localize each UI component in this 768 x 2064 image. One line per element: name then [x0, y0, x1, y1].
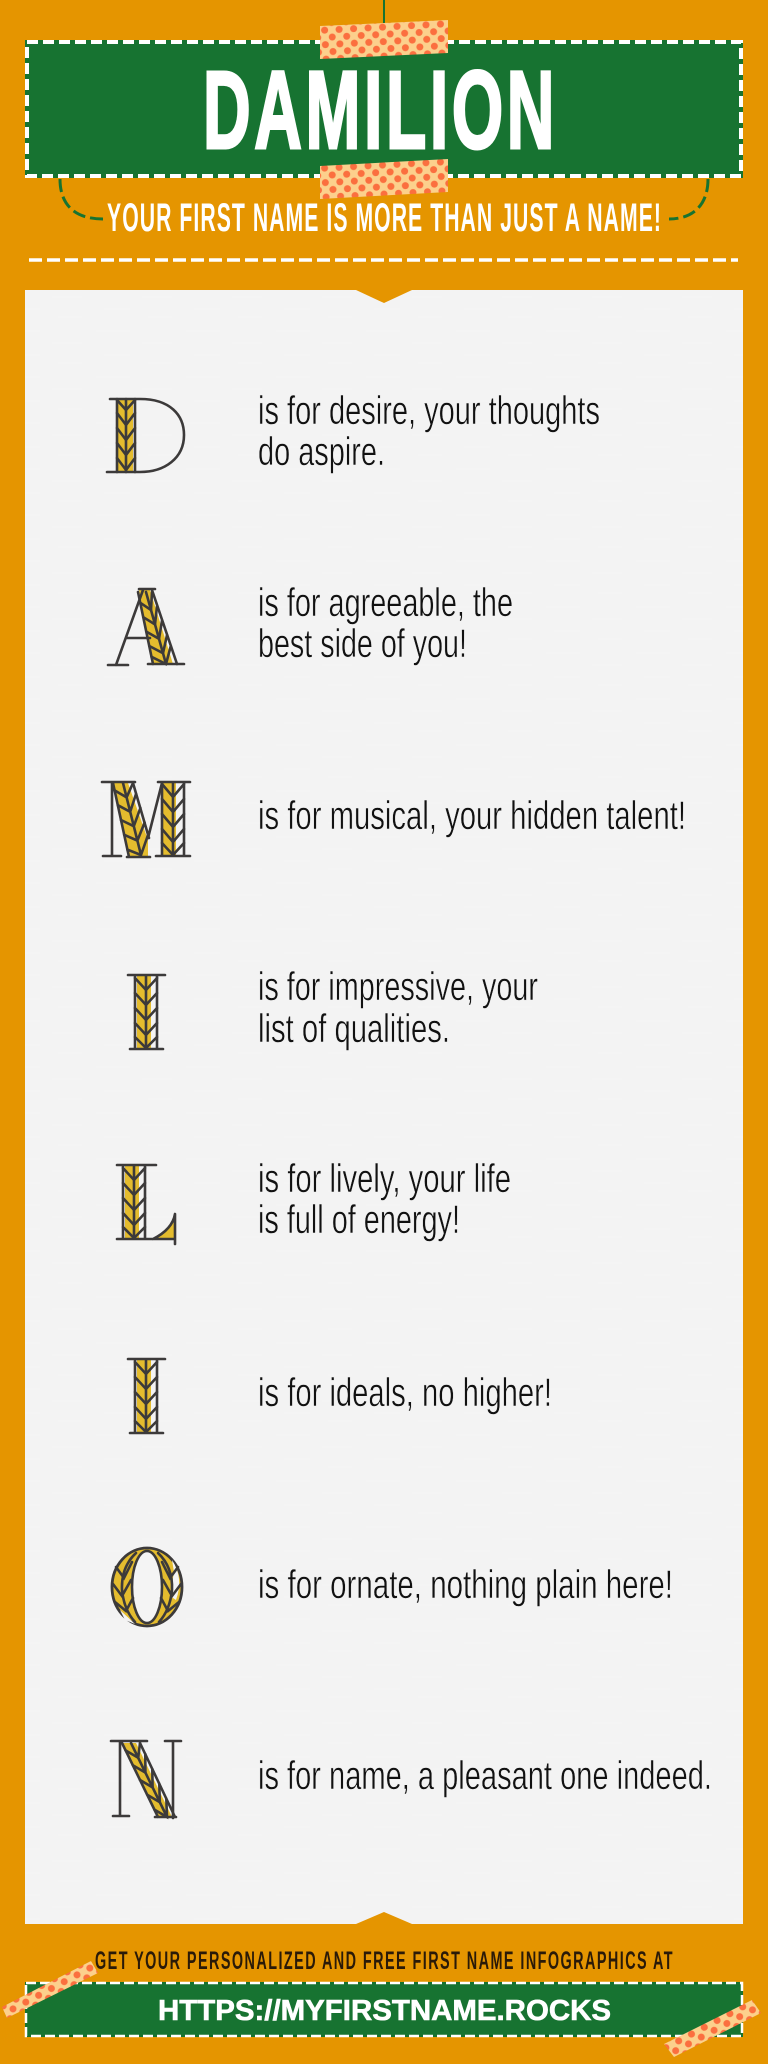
tape: bottom: [320, 159, 448, 199]
row N: [111, 1741, 712, 1818]
row A: [108, 581, 513, 666]
letter A: [108, 589, 184, 665]
text I: is for impressive, your: [258, 965, 538, 1009]
text L: [258, 1157, 511, 1242]
letter M: [102, 782, 190, 857]
dashed divider: [29, 258, 738, 262]
text D: [258, 389, 600, 474]
row D: [107, 389, 600, 474]
text L: is full of energy!: [258, 1198, 460, 1242]
row L: [117, 1157, 511, 1244]
text L: is for lively, your life: [258, 1157, 511, 1201]
footer url: HTTPS://MYFIRSTNAME.ROCKS: [158, 1995, 611, 2027]
row O: [112, 1548, 673, 1626]
text I: [258, 965, 538, 1051]
tape: footer left: [2, 1961, 98, 2018]
text D: is for desire, your thoughts: [258, 389, 600, 433]
row I (first): [128, 965, 538, 1051]
row I (second): [128, 1359, 552, 1433]
letter N: [111, 1741, 181, 1818]
footer banner: [25, 1982, 743, 2037]
letter D: [107, 399, 184, 472]
letter L: [117, 1165, 175, 1244]
panel: letters: [25, 290, 743, 1924]
tape: footer right: [664, 2000, 761, 2057]
text A: is for agreeable, the: [258, 581, 513, 625]
header banner: [25, 40, 743, 178]
connector curve left: [60, 179, 103, 219]
text I: list of qualities.: [258, 1007, 450, 1051]
text A: best side of you!: [258, 622, 467, 666]
connector curve right: [669, 179, 708, 219]
letter I: [128, 1359, 165, 1433]
text A: [258, 581, 513, 666]
letter I: [128, 975, 165, 1049]
row M: [102, 782, 686, 857]
text I: is for ideals, no higher!: [258, 1371, 552, 1415]
tape: top: [320, 20, 448, 59]
letter O: [112, 1548, 182, 1626]
text D: do aspire.: [258, 430, 385, 474]
hanging thread: [383, 0, 385, 25]
